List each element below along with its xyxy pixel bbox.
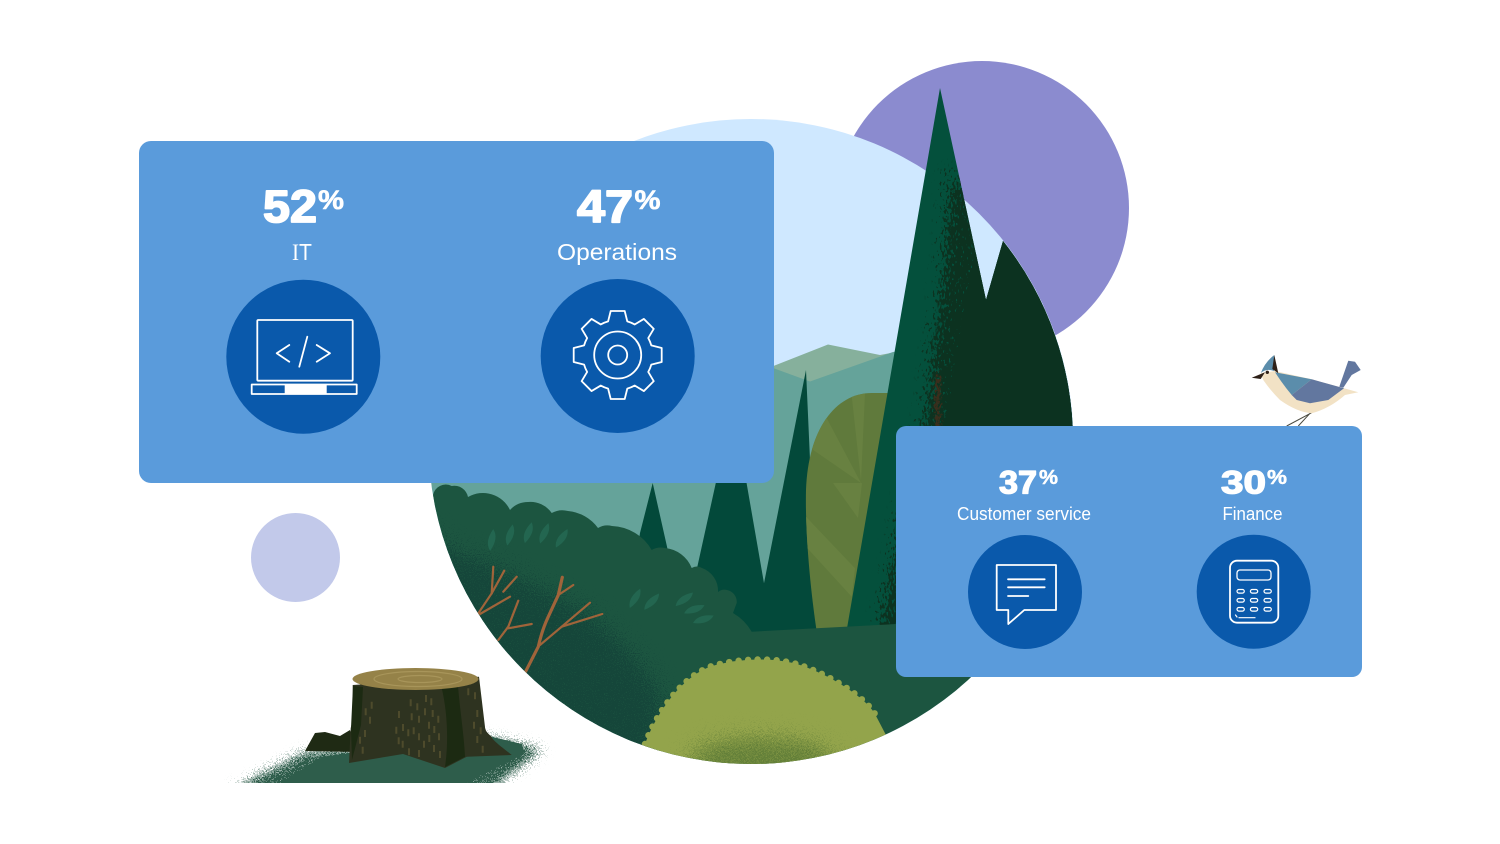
small lavender circle	[251, 513, 340, 602]
icon: gear	[541, 279, 695, 433]
bark marks	[360, 688, 483, 758]
hill shadow	[436, 514, 674, 751]
stat: 30%: 30	[1221, 464, 1266, 500]
near mountain	[420, 340, 960, 700]
solid dark side	[951, 241, 1073, 426]
stat: 52%	[263, 181, 344, 232]
label: Operations: Operations	[557, 239, 677, 265]
panel background	[896, 426, 1362, 677]
label: Customer service: Customer service	[957, 504, 1091, 524]
purple circle	[835, 61, 1129, 355]
tree base colour	[840, 80, 1080, 640]
stump shadows	[351, 686, 465, 767]
background pine trees	[636, 370, 818, 640]
tree dark side	[878, 170, 1090, 640]
icon: laptop code	[226, 280, 380, 434]
stat: 52%: 52	[263, 181, 317, 232]
foreground clipped to circle	[433, 484, 972, 764]
trunk tint	[934, 373, 941, 428]
panel: Customer service and Finance	[896, 426, 1362, 677]
stump body	[349, 677, 512, 768]
far mountain	[774, 344, 890, 382]
stat: 37%: %	[1039, 467, 1058, 489]
olive bush	[806, 393, 888, 628]
bush leaves	[487, 521, 715, 626]
mound grain	[226, 738, 544, 795]
icon: blue jay bird	[1252, 355, 1361, 426]
stat: 52%: %	[318, 185, 344, 215]
panel background	[139, 141, 774, 483]
back root	[305, 730, 356, 752]
mound core	[280, 737, 524, 783]
stat: 47%	[577, 181, 660, 232]
bare branches	[478, 567, 602, 673]
label: Finance: Finance	[1222, 504, 1282, 524]
icon: calculator	[1197, 535, 1311, 649]
stat: 47%: 47	[577, 181, 633, 232]
stat: 30%: %	[1267, 467, 1287, 489]
icon: chat bubble	[968, 535, 1082, 649]
tall pine tree	[847, 88, 1073, 627]
panel: IT and Operations	[139, 141, 774, 483]
foreground hill with scalloped bushes	[433, 484, 972, 764]
stat: 37%	[999, 464, 1058, 500]
yellow-green shrub	[642, 656, 886, 764]
stump top rings	[352, 668, 478, 690]
sky	[428, 119, 1074, 764]
tree stump on grassy mound	[226, 668, 544, 795]
distant landscape clipped to circle	[420, 340, 960, 700]
label: IT: IT	[292, 239, 312, 265]
stat: 37%: 37	[999, 464, 1037, 500]
forest scene circle	[420, 80, 1090, 800]
stat: 47%: %	[634, 185, 660, 215]
stat: 30%	[1221, 464, 1287, 500]
